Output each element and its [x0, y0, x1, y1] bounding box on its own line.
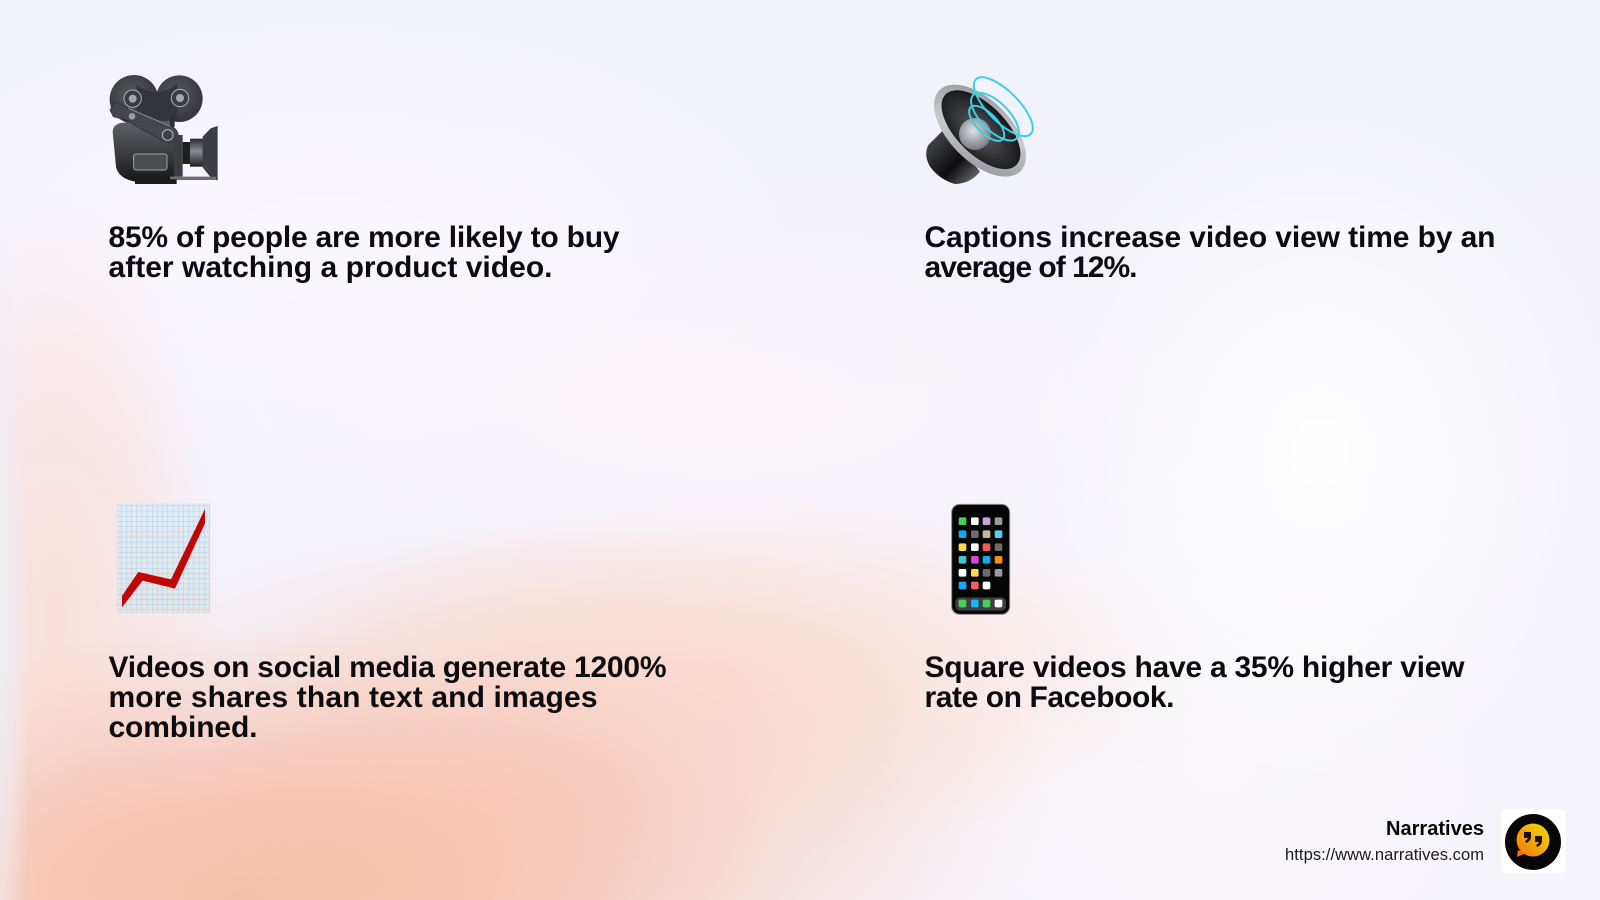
stat text: product video: 85% of people are more likely to buy [108, 221, 620, 254]
brand name: Narratives [1386, 818, 1484, 840]
icon: chart increasing [117, 504, 210, 613]
panel: product video stat: after watching a product video. [108, 251, 552, 284]
brand url: https://www.narratives.com [1285, 846, 1484, 864]
panel: product video stat [108, 75, 620, 284]
stat text: social media: Videos on social media generate 1200% [108, 651, 666, 684]
stat text: square video: Square videos have a 35% higher view [924, 651, 1465, 684]
icon: mobile phone [952, 504, 1010, 614]
panel: social media stat: more shares than text and images [108, 681, 598, 714]
panel: square video stat [924, 504, 1465, 714]
icon: movie camera [110, 75, 218, 184]
panel: social media stat [108, 504, 666, 744]
panel: captions stat [918, 68, 1496, 284]
logo [1501, 809, 1566, 873]
panel: captions stat: average of 12%. [924, 251, 1138, 284]
panel: social media stat: combined. [108, 711, 258, 744]
stat text: captions: Captions increase video view time by an [924, 221, 1496, 254]
icon: speaker [918, 68, 1042, 193]
panel: square video stat: rate on Facebook. [924, 681, 1174, 714]
